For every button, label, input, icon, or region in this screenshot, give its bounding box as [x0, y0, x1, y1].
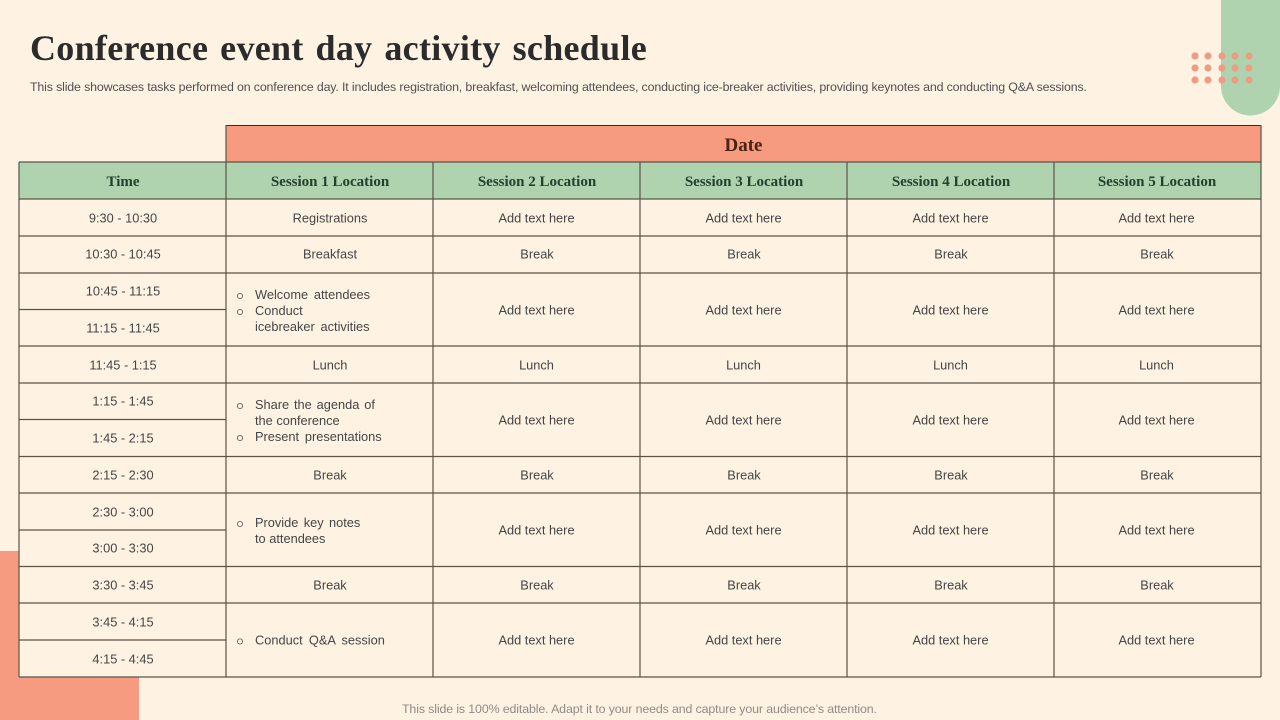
time column: 2:30 - 3:00: [92, 504, 154, 520]
session 4 column: Break: [934, 468, 968, 482]
session 3 column: Add text here: [705, 302, 782, 318]
bullet list: agenda: Share the agenda of: [255, 397, 375, 412]
time column: 2:15 - 2:30: [92, 468, 154, 482]
session 1 column: Lunch: [313, 358, 347, 372]
session 4 column: Add text here: [912, 522, 989, 538]
session 1 column: Break: [313, 468, 347, 482]
column headers: Session 3 Location: [685, 174, 804, 190]
subtitle: This slide showcases tasks performed on conference day. It includes registration, breakfast, welcoming attendees, conducting ice-breaker activities, providing keynotes and conducting Q&A sessions.: [30, 80, 1087, 94]
session 5 column: Add text here: [1118, 522, 1195, 538]
date header: Date: [725, 135, 762, 156]
session 1 column: Break: [313, 578, 347, 592]
session 3 column: Add text here: [705, 210, 782, 226]
session 5 column: Break: [1140, 578, 1174, 592]
session 5 column: Break: [1140, 468, 1174, 482]
bullet list: agenda: [237, 397, 382, 444]
session 2 column: Break: [520, 468, 554, 482]
session 4 column: Add text here: [912, 302, 989, 318]
session 4 column: Add text here: [912, 632, 989, 648]
decorative shape: salmon corner block: [0, 551, 139, 720]
session 2 column: Add text here: [498, 210, 575, 226]
bullet list: welcome: icebreaker activities: [255, 319, 370, 334]
session 5 column: Add text here: [1118, 632, 1195, 648]
session 3 column: Lunch: [726, 358, 761, 372]
bullet list: key notes: [237, 515, 360, 546]
session 5 column: Lunch: [1139, 358, 1174, 372]
bullet list: Q&A: Conduct Q&A session: [255, 632, 385, 648]
title: Conference event day activity schedule: [30, 28, 647, 68]
session 3 column: Break: [727, 578, 761, 592]
session 3 column: Add text here: [705, 522, 782, 538]
bullet list: agenda: the conference: [255, 413, 340, 428]
session 2 column: Add text here: [498, 632, 575, 648]
session 2 column: Break: [520, 246, 554, 262]
bullet list: agenda: Present presentations: [255, 429, 382, 444]
session 3 column: Break: [727, 246, 761, 262]
time column: 10:45 - 11:15: [86, 284, 160, 298]
session 2 column: [498, 210, 575, 648]
session 2 column: Break: [520, 578, 554, 592]
table grid lines: [19, 125, 1261, 677]
session 1 column: Breakfast: [303, 246, 357, 262]
session 3 column: Break: [727, 468, 761, 482]
time column: 10:30 - 10:45: [85, 246, 161, 262]
column headers: Session 2 Location: [478, 174, 597, 190]
bullet list: welcome: Conduct: [255, 303, 303, 318]
column headers: [19, 162, 1261, 199]
session 5 column: Add text here: [1118, 210, 1195, 226]
time column: 3:30 - 3:45: [92, 578, 154, 592]
session 2 column: Add text here: [498, 302, 575, 318]
session 4 column: Break: [934, 578, 968, 592]
column headers: Time: [106, 174, 140, 190]
session 3 column: Add text here: [705, 632, 782, 648]
session 5 column: [1118, 210, 1195, 648]
schedule table: [19, 125, 1261, 677]
session 1 column: [237, 210, 385, 648]
date header: [226, 125, 1261, 162]
session 4 column: Lunch: [933, 358, 968, 372]
bullet list: welcome: Welcome attendees: [255, 287, 370, 302]
session 3 column: [705, 210, 782, 648]
time column: 3:00 - 3:30: [92, 540, 154, 556]
column headers: Session 4 Location: [892, 174, 1011, 190]
session 2 column: Add text here: [498, 412, 575, 428]
session 5 column: Add text here: [1118, 302, 1195, 318]
time column: 9:30 - 10:30: [89, 210, 157, 226]
footer note: This slide is 100% editable. Adapt it to your needs and capture your audience’s attention.: [402, 702, 877, 716]
session 3 column: Add text here: [705, 412, 782, 428]
time column: 11:45 - 1:15: [89, 358, 157, 372]
session 5 column: Break: [1140, 246, 1174, 262]
session 4 column: Break: [934, 246, 968, 262]
bullet list: key notes: Provide key notes: [255, 515, 360, 530]
session 4 column: Add text here: [912, 412, 989, 428]
time column: 4:15 - 4:45: [92, 652, 154, 666]
time column: 11:15 - 11:45: [86, 320, 160, 336]
session 5 column: Add text here: [1118, 412, 1195, 428]
time column: 1:15 - 1:45: [92, 394, 154, 408]
time column: 3:45 - 4:15: [92, 614, 154, 630]
icon: dot grid: [1191, 52, 1253, 84]
column headers: Session 5 Location: [1098, 174, 1217, 190]
column headers: Session 1 Location: [271, 174, 390, 190]
session 4 column: Add text here: [912, 210, 989, 226]
session 4 column: [912, 210, 989, 648]
session 2 column: Lunch: [519, 358, 554, 372]
decorative shape: green rounded tab: [1221, 0, 1280, 116]
time column: [85, 210, 161, 666]
session 2 column: Add text here: [498, 522, 575, 538]
bullet list: key notes: to attendees: [255, 531, 325, 546]
time column: 1:45 - 2:15: [92, 430, 154, 446]
session 1 column: Registrations: [293, 210, 367, 226]
bullet list: welcome: [237, 287, 370, 334]
